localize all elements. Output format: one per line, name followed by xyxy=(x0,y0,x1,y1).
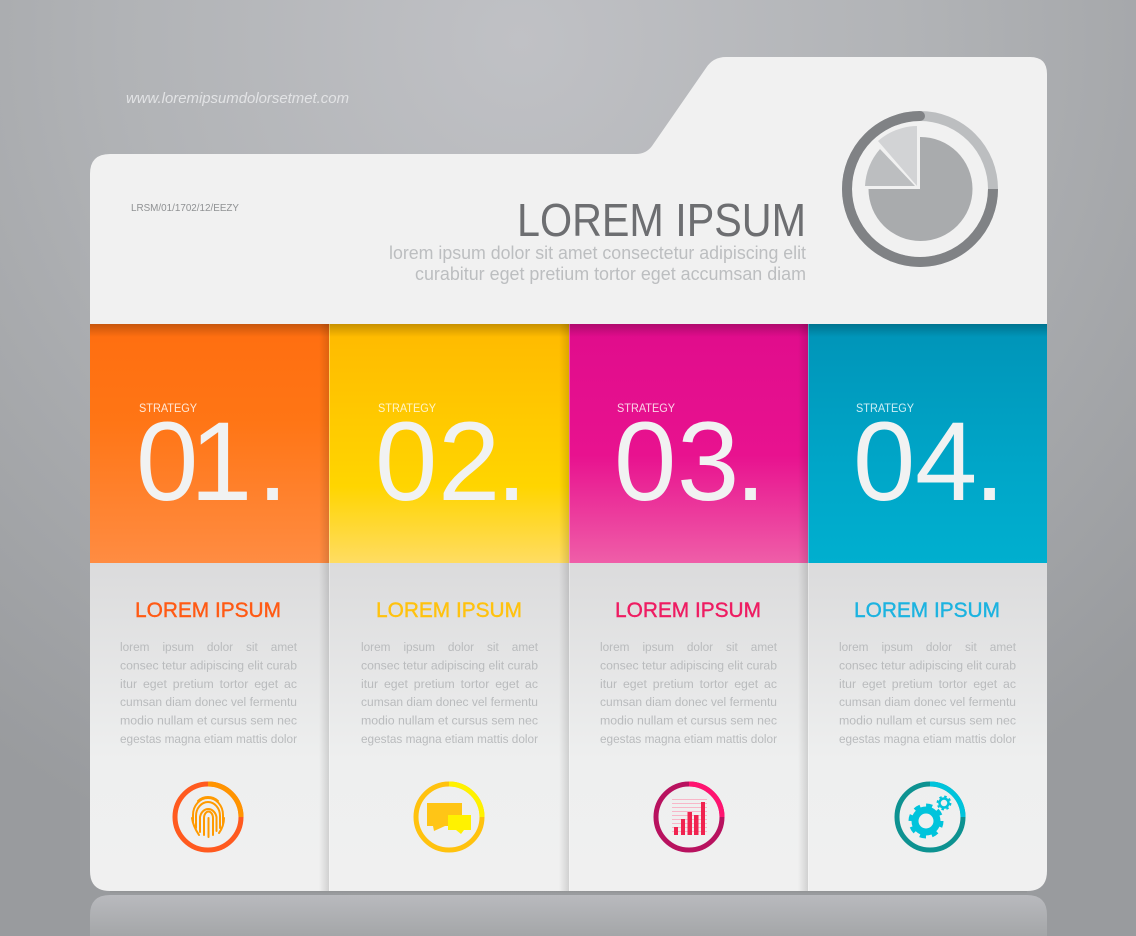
card edge shadows xyxy=(90,324,1047,892)
body text: cumsan diam donec vel fermentu xyxy=(120,695,297,709)
icon: pie chart ring xyxy=(847,111,993,262)
body text: egestas magna etiam mattis dolor xyxy=(600,732,777,746)
body text: lorem ipsum dolor sit amet xyxy=(600,640,778,654)
strategy label: STRATEGY xyxy=(139,403,197,415)
lower panel xyxy=(90,563,329,891)
colour band xyxy=(90,324,329,563)
body text: itur eget pretium tortor eget ac xyxy=(600,677,777,691)
body text: itur eget pretium tortor eget ac xyxy=(361,677,538,691)
body text: consec tetur adipiscing elit curab xyxy=(361,658,538,672)
body text: lorem ipsum dolor sit amet xyxy=(361,640,539,654)
panel: strategy 01 xyxy=(90,324,329,891)
lower panel xyxy=(329,563,569,891)
body text xyxy=(600,640,778,746)
number: 01. xyxy=(136,399,288,524)
heading: LOREM IPSUM xyxy=(376,599,522,622)
icon: fingerprint xyxy=(175,784,241,850)
body text: lorem ipsum dolor sit amet xyxy=(120,640,298,654)
icon: chat bubbles xyxy=(416,784,482,850)
subtitle xyxy=(389,243,806,284)
colour band xyxy=(569,324,808,563)
strategy label: STRATEGY xyxy=(617,403,675,415)
website url: www.loremipsumdolorsetmet.com xyxy=(126,91,349,107)
body text: egestas magna etiam mattis dolor xyxy=(839,732,1016,746)
lower panel xyxy=(569,563,808,891)
heading: LOREM IPSUM xyxy=(615,599,761,622)
subtitle: curabitur eget pretium tortor eget accumsan diam xyxy=(415,264,806,284)
reference code: LRSM/01/1702/12/EEZY xyxy=(131,202,239,214)
body text: modio nullam et cursus sem nec xyxy=(600,714,777,728)
body text: modio nullam et cursus sem nec xyxy=(839,714,1016,728)
body text: cumsan diam donec vel fermentu xyxy=(839,695,1016,709)
body text: modio nullam et cursus sem nec xyxy=(120,714,297,728)
body text: egestas magna etiam mattis dolor xyxy=(361,732,538,746)
body text xyxy=(839,640,1017,746)
body text xyxy=(361,640,539,746)
icon: gears xyxy=(897,784,963,850)
body text: cumsan diam donec vel fermentu xyxy=(361,695,538,709)
body text: lorem ipsum dolor sit amet xyxy=(839,640,1017,654)
body text: egestas magna etiam mattis dolor xyxy=(120,732,297,746)
body text: consec tetur adipiscing elit curab xyxy=(839,658,1016,672)
body text: itur eget pretium tortor eget ac xyxy=(120,677,297,691)
colour band xyxy=(808,324,1047,563)
body text: consec tetur adipiscing elit curab xyxy=(120,658,297,672)
heading: LOREM IPSUM xyxy=(854,599,1000,622)
panel: folder header xyxy=(90,57,1047,891)
heading: LOREM IPSUM xyxy=(135,599,281,622)
colour band xyxy=(329,324,569,563)
body text: itur eget pretium tortor eget ac xyxy=(839,677,1016,691)
number: 04. xyxy=(853,399,1005,524)
panel: strategy 02 xyxy=(329,324,569,891)
number: 03. xyxy=(614,399,766,524)
subtitle: lorem ipsum dolor sit amet consectetur adipiscing elit xyxy=(389,243,806,263)
folder shape xyxy=(90,57,1047,891)
reflection of card xyxy=(90,895,1047,936)
strategy label: STRATEGY xyxy=(378,403,436,415)
body text: cumsan diam donec vel fermentu xyxy=(600,695,777,709)
icon: bar chart xyxy=(656,784,722,850)
number: 02. xyxy=(375,399,527,524)
main title: LOREM IPSUM xyxy=(517,194,806,246)
body text: modio nullam et cursus sem nec xyxy=(361,714,538,728)
body text: consec tetur adipiscing elit curab xyxy=(600,658,777,672)
panel: strategy 04 xyxy=(808,324,1047,891)
lower panel xyxy=(808,563,1047,891)
strategy label: STRATEGY xyxy=(856,403,914,415)
body text xyxy=(120,640,298,746)
panel: strategy 03 xyxy=(569,324,808,891)
